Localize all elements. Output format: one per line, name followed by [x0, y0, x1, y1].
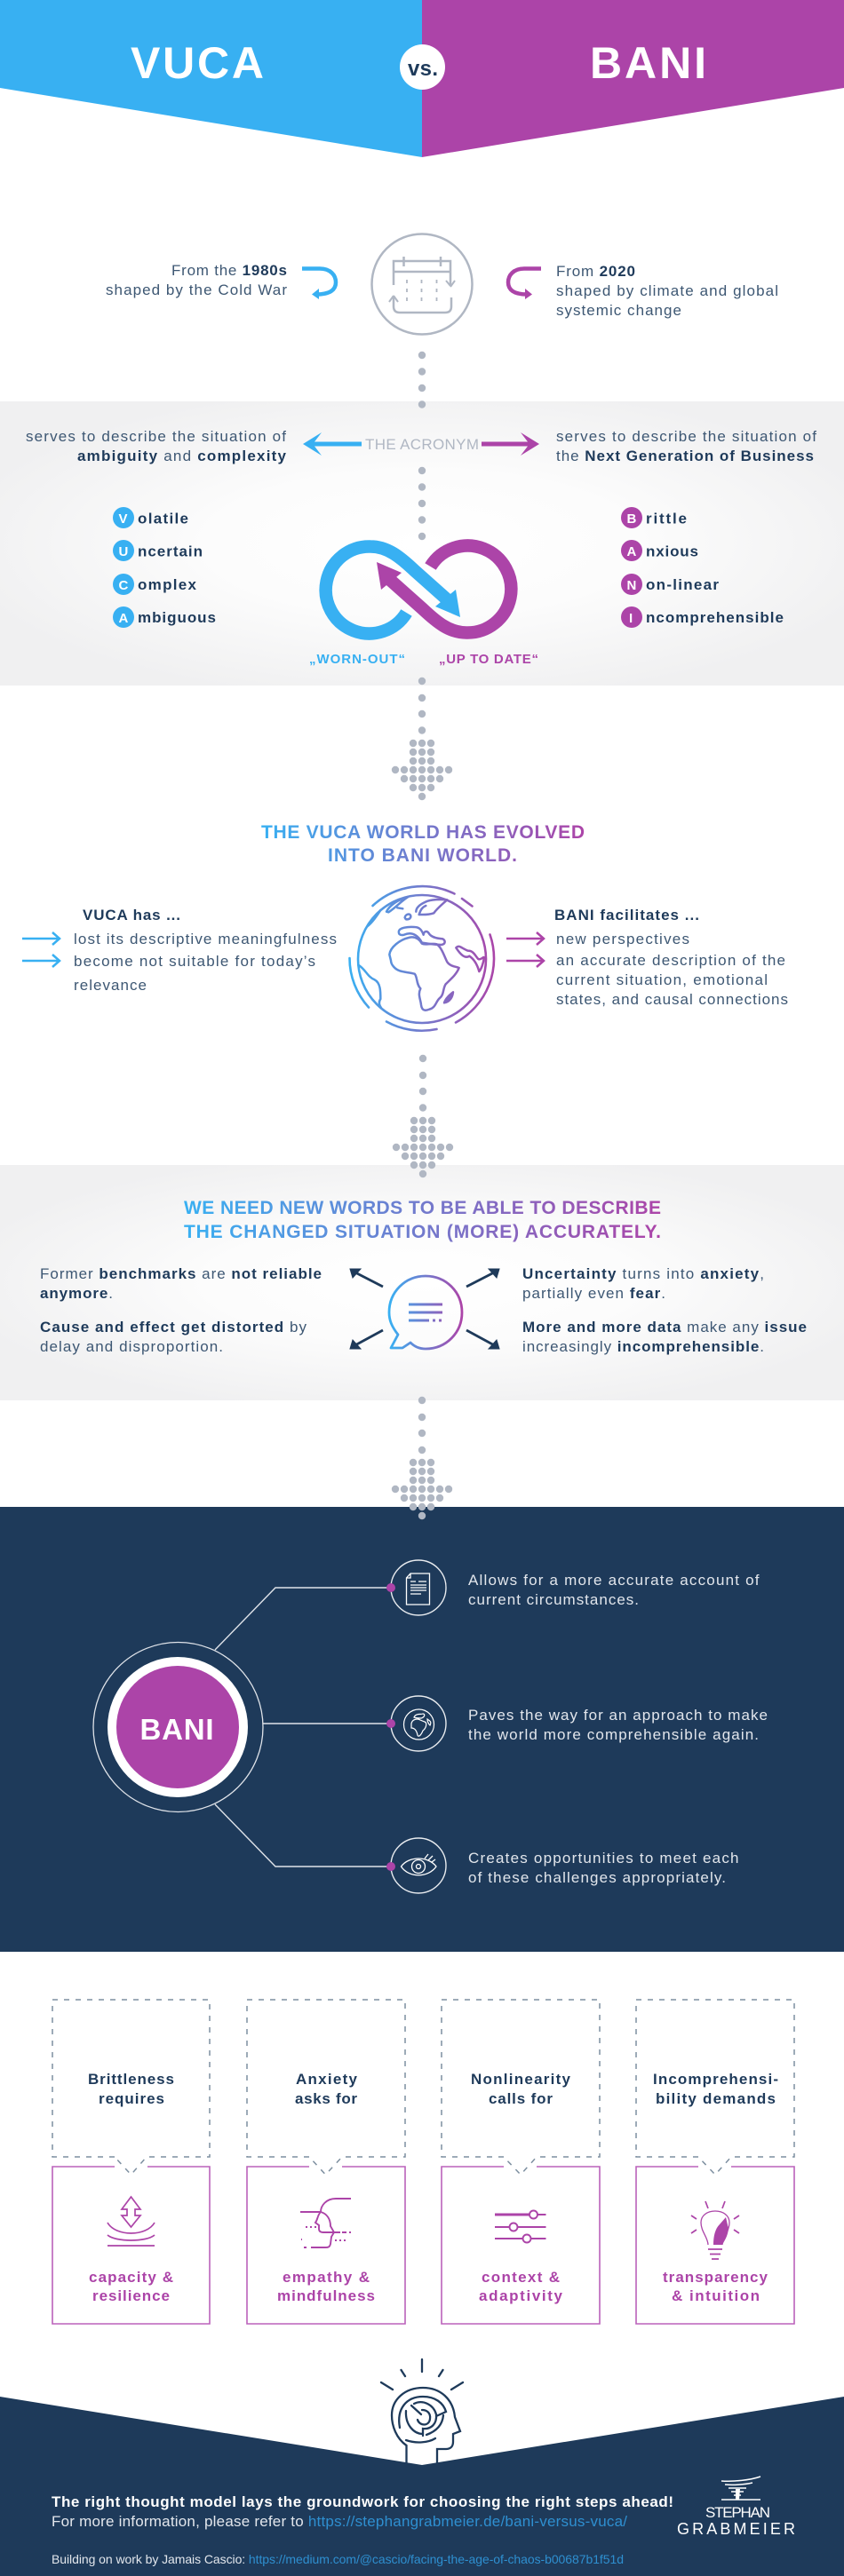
outcome: empathy and mindfulness: mindfulness	[277, 2287, 375, 2304]
text: right statements	[522, 1265, 807, 1355]
card: incomprehensibility	[636, 2000, 794, 2324]
outcome: context and adaptivity: context &	[482, 2269, 560, 2286]
dotted arrow 1	[392, 678, 452, 800]
text: VUCA origin: From the 1980s	[171, 262, 287, 279]
card: anxiety: asks for	[295, 2090, 357, 2107]
text: right statements: increasingly incomprehensible.	[522, 1338, 764, 1355]
arrow: blue return	[302, 268, 336, 299]
icon: globe	[349, 886, 494, 1031]
header: VUCA panel	[0, 0, 422, 157]
label: the acronym with arrows	[303, 432, 539, 456]
arrows: purple pair	[506, 932, 544, 967]
text: BANI facilitates: current situation, emotional	[556, 971, 768, 988]
heading: VUCA world evolved: THE VUCA WORLD HAS EVOLVED	[261, 822, 585, 843]
card: brittleness	[52, 2000, 210, 2324]
logo: Stephan Grabmeier: GRABMEIER	[677, 2520, 795, 2538]
dotted arrow 2 tip	[410, 1161, 435, 1177]
credit: Building on work by Jamais Cascio: https://medium.com/@cascio/facing-the-age-of-chaos-b00687b1f51d	[52, 2552, 624, 2566]
vs badge	[400, 44, 445, 90]
list: VUCA letters: olatile	[138, 510, 188, 527]
text: VUCA origin	[106, 262, 287, 298]
heading: new words	[184, 1198, 661, 1242]
list: BANI letters: A	[627, 544, 636, 559]
list: VUCA letters: V	[119, 511, 128, 527]
card: incomprehensibility: Incomprehensi-	[653, 2071, 778, 2088]
text: right statements: Uncertainty turns into anxiety,	[522, 1265, 764, 1282]
card: brittleness: Brittleness	[88, 2071, 174, 2088]
heading: new words: WE NEED NEW WORDS TO BE ABLE TO DESCRIBE	[184, 1198, 661, 1218]
item: eye: of these challenges appropriately.	[468, 1869, 726, 1886]
text: BANI origin: systemic change	[556, 302, 681, 319]
label: up to date: „UP TO DATE“	[439, 652, 538, 667]
text: BANI acronym description: the Next Generation of Business	[556, 448, 814, 464]
item: eye: Creates opportunities to meet each	[468, 1850, 739, 1867]
text: VUCA has: lost its descriptive meaningfulness	[74, 931, 337, 947]
card: incomprehensibility: bility demands	[656, 2090, 776, 2107]
list: VUCA letters: U	[119, 544, 128, 559]
arrows: blue pair	[22, 932, 60, 967]
item: globe: the world more comprehensible again.	[468, 1726, 759, 1743]
text: VUCA has: VUCA has ...	[83, 907, 180, 923]
label: the acronym with arrows: THE ACRONYM	[365, 436, 479, 453]
card: nonlinearity	[442, 2000, 600, 2324]
connector lines	[215, 1588, 387, 1867]
logo: Stephan Grabmeier	[677, 2477, 795, 2538]
text: VUCA acronym description	[26, 428, 287, 464]
icon: head with maze	[381, 2359, 463, 2464]
card: anxiety: Anxiety	[296, 2071, 358, 2088]
card: brittleness: requires	[99, 2090, 164, 2107]
outcome: empathy and mindfulness: empathy &	[283, 2269, 370, 2286]
text: BANI facilitates: an accurate description of the	[556, 952, 785, 969]
panel: footer	[0, 2397, 844, 2576]
list: VUCA letters: A	[119, 611, 128, 626]
list: VUCA letters: C	[119, 578, 128, 593]
text: BANI facilitates: new perspectives	[556, 931, 689, 947]
icon: infinity arrows	[326, 546, 511, 633]
text: BANI facilitates	[554, 907, 788, 1008]
panel: new words	[0, 1165, 844, 1400]
card: anxiety	[247, 2000, 405, 2324]
vs badge: vs.	[408, 57, 438, 81]
item: document: Allows for a more accurate account of	[468, 1572, 760, 1589]
text: BANI origin: shaped by climate and global	[556, 282, 778, 299]
logo: Stephan Grabmeier: STEPHAN	[705, 2504, 770, 2521]
list: BANI letters: N	[627, 578, 636, 593]
outcome: transparency and intuition	[636, 2167, 794, 2324]
item: eye	[386, 1838, 739, 1893]
closing statement: The right thought model lays the groundwork for choosing the right steps ahead!	[52, 2493, 673, 2510]
icon: calendar cycle	[371, 234, 473, 334]
outcome: capacity and resilience: resilience	[92, 2287, 170, 2304]
outcome: capacity and resilience	[52, 2167, 210, 2324]
text: right statements: More and more data make any issue	[522, 1319, 807, 1336]
outcome: context and adaptivity	[442, 2167, 600, 2324]
central BANI badge	[93, 1643, 263, 1811]
item: globe: Paves the way for an approach to make	[468, 1707, 768, 1724]
text: BANI origin	[556, 263, 778, 319]
panel: BANI benefits	[0, 1507, 844, 1952]
text: VUCA has: relevance	[74, 977, 147, 994]
heading: BANI: BANI	[590, 38, 706, 88]
reference link: For more information, please refer to https://stephangrabmeier.de/bani-versus-vuca/	[52, 2513, 627, 2530]
text: right statements: partially even fear.	[522, 1285, 665, 1302]
icon: speech bubble	[389, 1276, 462, 1349]
text: left statements: Former benchmarks are not reliable	[40, 1265, 322, 1282]
outcome: transparency and intuition: & intuition	[672, 2287, 760, 2304]
item: globe	[386, 1696, 768, 1751]
text: left statements: Cause and effect get distorted by	[40, 1319, 307, 1336]
text: BANI acronym description: serves to describe the situation of	[556, 428, 816, 445]
text: VUCA has: become not suitable for today’s	[74, 953, 315, 970]
label: worn-out: „WORN-OUT“	[309, 652, 405, 667]
header: BANI panel	[422, 0, 844, 157]
outcome: context and adaptivity: adaptivity	[479, 2287, 563, 2304]
card: nonlinearity: calls for	[489, 2090, 553, 2107]
list: BANI letters: ncomprehensible	[646, 609, 784, 626]
list: BANI letters: I	[629, 611, 633, 626]
heading: VUCA world evolved	[261, 822, 585, 866]
list: VUCA letters: ncertain	[138, 543, 203, 559]
arrows: four directions	[350, 1269, 499, 1349]
outcome: transparency and intuition: transparency	[663, 2269, 768, 2286]
outcome: capacity and resilience: capacity &	[89, 2269, 173, 2286]
text: BANI acronym description	[556, 428, 816, 464]
text: left statements	[40, 1265, 322, 1355]
dotted arrow 2	[393, 1055, 453, 1160]
panel: the acronym	[0, 401, 844, 686]
text: BANI facilitates: states, and causal connections	[556, 991, 788, 1008]
list: BANI letters	[621, 507, 784, 628]
list: VUCA letters: omplex	[138, 576, 197, 593]
text: BANI origin: From 2020	[556, 263, 635, 280]
arrow: purple return	[508, 268, 541, 299]
text: left statements: delay and disproportion.	[40, 1338, 223, 1355]
list: BANI letters: B	[627, 511, 636, 527]
text: BANI facilitates: BANI facilitates ...	[554, 907, 699, 923]
text: VUCA origin: shaped by the Cold War	[106, 281, 287, 298]
list: VUCA letters: mbiguous	[138, 609, 216, 626]
item: document: current circumstances.	[468, 1591, 639, 1608]
text: VUCA acronym description: serves to describe the situation of	[26, 428, 286, 445]
text: VUCA acronym description: ambiguity and complexity	[77, 448, 287, 464]
outcome: empathy and mindfulness	[247, 2167, 405, 2324]
heading: VUCA: VUCA	[131, 38, 264, 88]
card: nonlinearity: Nonlinearity	[471, 2071, 571, 2088]
list: VUCA letters	[113, 507, 216, 628]
item: document	[386, 1560, 760, 1615]
list: BANI letters: rittle	[646, 510, 687, 527]
central BANI badge: BANI	[140, 1713, 213, 1746]
list: BANI letters: on-linear	[646, 576, 719, 593]
list: BANI letters: nxious	[646, 543, 698, 559]
heading: new words: THE CHANGED SITUATION (MORE) ACCURATELY.	[184, 1222, 661, 1242]
text: VUCA has	[74, 907, 337, 994]
text: left statements: anymore.	[40, 1285, 113, 1302]
dotted connector 1	[418, 352, 426, 540]
dotted arrow 3	[392, 1397, 452, 1519]
heading: VUCA world evolved: INTO BANI WORLD.	[328, 845, 517, 866]
